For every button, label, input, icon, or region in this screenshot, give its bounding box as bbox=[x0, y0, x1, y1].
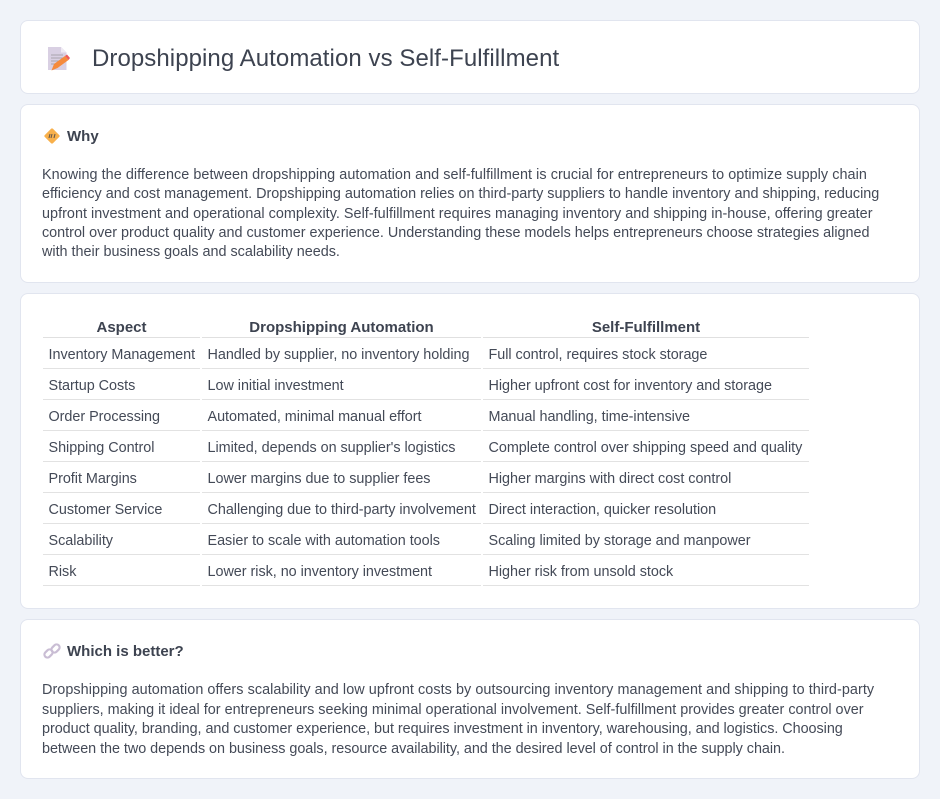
comparison table: Inventory Management bbox=[48, 347, 195, 363]
panel: why bbox=[20, 104, 920, 283]
comparison table bbox=[43, 319, 809, 586]
icon: warning diamond bbox=[44, 128, 60, 144]
text block: why: upfront investment and operational complexity. Self-fulfillment requires managing inventory and shipping in-house, offering greater bbox=[42, 206, 873, 222]
comparison table: Automated, minimal manual effort bbox=[208, 409, 421, 425]
comparison table: Lower risk, no inventory investment bbox=[208, 564, 432, 580]
text block: why: with their business goals and scalability needs. bbox=[42, 244, 340, 260]
panel: which is better bbox=[20, 619, 920, 779]
text block: which is better: suppliers, making it ideal for entrepreneurs seeking minimal operational involvement. Self-fulfillment provides greater control over bbox=[42, 702, 864, 718]
comparison table: Aspect bbox=[96, 319, 147, 336]
comparison table: Manual handling, time-intensive bbox=[488, 409, 690, 425]
comparison table: Higher margins with direct cost control bbox=[488, 471, 731, 487]
comparison table: Complete control over shipping speed and quality bbox=[488, 440, 802, 456]
comparison table: Profit Margins bbox=[48, 471, 137, 487]
text block: which is better: product quality, branding, and customer experience, but requires investment in inventory, warehousing, and logistics. Choosing bbox=[42, 721, 843, 737]
comparison table: Full control, requires stock storage bbox=[488, 347, 707, 363]
text block: why: Knowing the difference between dropshipping automation and self-fulfillment is crucial for entrepreneurs to optimize supply chain bbox=[42, 167, 867, 183]
panel: title header bbox=[20, 20, 920, 94]
comparison table: Dropshipping Automation bbox=[249, 319, 434, 336]
comparison table: Higher risk from unsold stock bbox=[488, 564, 673, 580]
comparison table: Order Processing bbox=[48, 409, 160, 425]
comparison table: Easier to scale with automation tools bbox=[208, 533, 440, 549]
text block: which is better: Dropshipping automation offers scalability and low upfront costs by outsourcing inventory management and shipping to third-party bbox=[42, 682, 874, 698]
icon: chain link bbox=[43, 643, 61, 659]
heading: which is better: Which is better? bbox=[67, 643, 184, 660]
text block: why bbox=[42, 167, 879, 260]
heading: why: Why bbox=[67, 128, 99, 145]
comparison table: Challenging due to third-party involvement bbox=[208, 502, 476, 518]
comparison table: Scalability bbox=[48, 533, 113, 549]
comparison table: Risk bbox=[48, 564, 76, 580]
icon: memo with pencil bbox=[48, 47, 70, 70]
comparison table: Startup Costs bbox=[48, 378, 135, 394]
text block: why: efficiency and cost management. Dropshipping automation relies on third-party suppliers to handle inventory and shipping, reducing bbox=[42, 186, 879, 202]
text block: which is better: between the two depends on business goals, resource availability, and the desired level of control in the supply chain. bbox=[42, 741, 785, 757]
title: Dropshipping Automation vs Self-Fulfillment bbox=[92, 45, 559, 72]
comparison table: Low initial investment bbox=[208, 378, 344, 394]
comparison table: Handled by supplier, no inventory holding bbox=[208, 347, 469, 363]
comparison table: Scaling limited by storage and manpower bbox=[488, 533, 751, 549]
panel: comparison table bbox=[20, 293, 920, 609]
comparison table: Higher upfront cost for inventory and storage bbox=[488, 378, 772, 394]
comparison table: Shipping Control bbox=[48, 440, 154, 456]
text block: which is better bbox=[42, 682, 874, 757]
comparison table: Self-Fulfillment bbox=[592, 319, 700, 336]
text block: why: control over product quality and customer experience. Understanding these models helps entrepreneurs choose strategies aligned bbox=[42, 225, 870, 241]
comparison table: Customer Service bbox=[48, 502, 162, 518]
comparison table: Lower margins due to supplier fees bbox=[208, 471, 430, 487]
comparison table: Direct interaction, quicker resolution bbox=[488, 502, 716, 518]
comparison table: Limited, depends on supplier's logistics bbox=[208, 440, 455, 456]
